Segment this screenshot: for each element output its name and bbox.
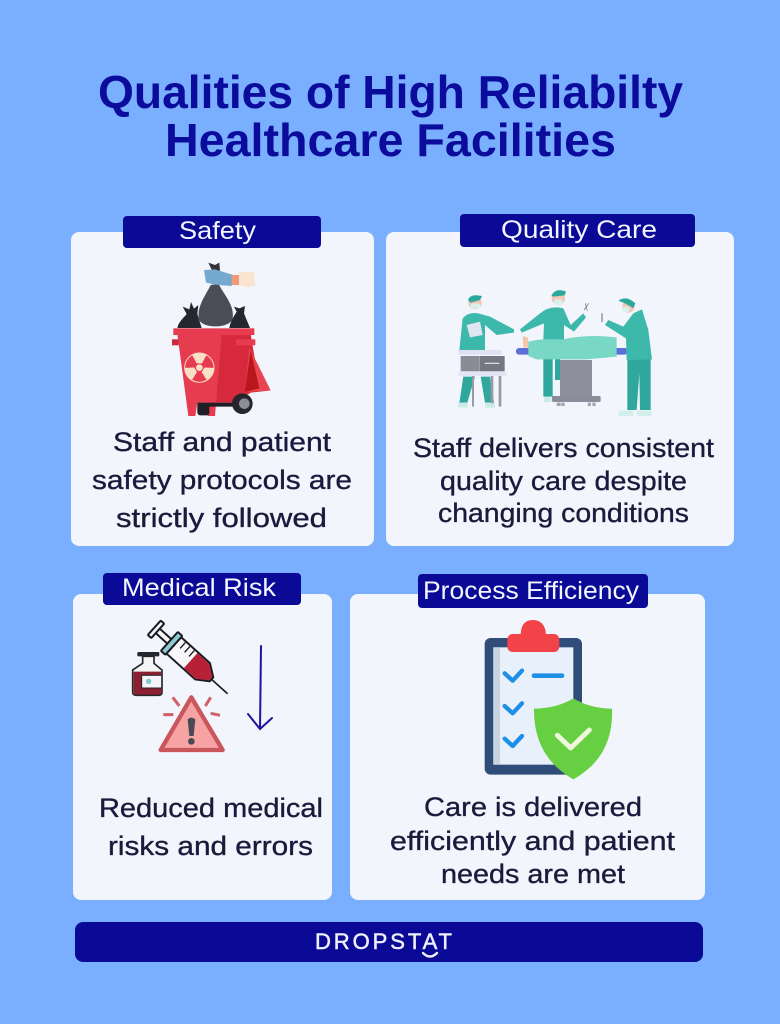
heading: medical risk: Medical Risk	[122, 574, 277, 602]
title: Healthcare Facilities	[165, 114, 616, 166]
body text: process efficiency: needs are met	[441, 859, 626, 889]
body text: medical risk: risks and errors	[108, 831, 313, 861]
heading: safety	[123, 216, 321, 248]
body text: safety: Staff and patient	[113, 427, 332, 457]
body text: process efficiency: Care is delivered	[424, 792, 642, 822]
icon: clipboard and shield	[485, 620, 612, 779]
title: Qualities of High Reliabilty	[98, 66, 683, 118]
body text: safety	[92, 427, 352, 533]
body text: medical risk: Reduced medical	[99, 793, 323, 823]
icon: warning triangle	[161, 697, 223, 750]
body text: quality care	[413, 433, 715, 528]
heading: quality care: Quality Care	[501, 216, 657, 244]
body text: process efficiency	[390, 792, 676, 889]
icon: vial	[133, 652, 162, 695]
body text: process efficiency: efficiently and patient	[390, 826, 676, 856]
footer bar: dropstat logo: DROPSTAT	[315, 929, 452, 954]
icon: waste bin	[172, 263, 271, 416]
right surgeon	[602, 298, 652, 416]
heading: safety: Safety	[179, 217, 257, 245]
footer bar: dropstat logo	[75, 922, 703, 962]
cart and left surgeon	[458, 295, 514, 408]
heading: process efficiency: Process Efficiency	[423, 577, 640, 605]
operating table	[516, 336, 628, 406]
panel: safety	[71, 232, 374, 546]
middle surgeon	[520, 290, 589, 402]
heading: medical risk	[103, 573, 301, 605]
body text: safety: strictly followed	[116, 503, 327, 533]
body text: safety: safety protocols are	[92, 465, 352, 495]
body text: quality care: quality care despite	[440, 466, 687, 496]
panel: process efficiency	[350, 594, 705, 900]
body text: medical risk	[99, 793, 323, 861]
icon: syringe	[146, 618, 236, 703]
heading: quality care	[460, 214, 695, 247]
icon: syringe, vial and warning	[133, 618, 236, 750]
body text: quality care: Staff delivers consistent	[413, 433, 715, 463]
body text: quality care: changing conditions	[438, 498, 689, 528]
icon: surgical team	[458, 290, 652, 416]
panel: medical risk	[73, 594, 332, 900]
title	[98, 66, 683, 166]
icon: down arrow	[248, 646, 272, 729]
panel: quality care	[386, 232, 734, 546]
